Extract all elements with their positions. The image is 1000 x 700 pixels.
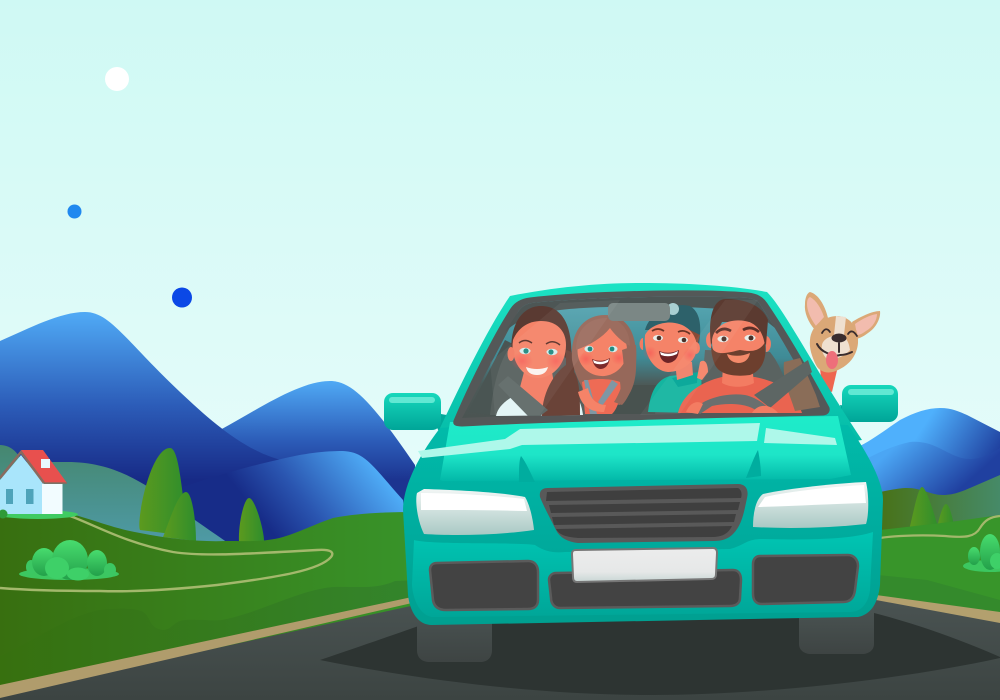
small shrub xyxy=(0,510,8,518)
blue dot large xyxy=(172,288,192,308)
right bush main xyxy=(980,534,1000,570)
dog right ear xyxy=(852,311,880,339)
woman iris right xyxy=(548,349,554,355)
dog right ear inner xyxy=(855,314,877,335)
girl blush left xyxy=(578,352,594,366)
car xyxy=(384,283,898,662)
grille slat 3 xyxy=(552,514,736,525)
tree 2 xyxy=(163,492,196,541)
far peak right xyxy=(220,381,415,560)
woman hair back xyxy=(511,306,571,365)
front wall xyxy=(0,455,44,514)
olive hill xyxy=(880,475,1000,560)
right side mirror xyxy=(840,385,898,425)
bush base xyxy=(19,568,119,580)
tree 3 xyxy=(239,498,264,542)
bush right xyxy=(963,534,1000,572)
girl face xyxy=(578,326,627,376)
main peak xyxy=(0,312,290,560)
driver seat xyxy=(700,350,795,410)
bush main lobe xyxy=(52,540,88,580)
boy neck xyxy=(675,362,693,380)
man eye left xyxy=(718,336,728,342)
girl arm xyxy=(578,388,606,412)
bush far left xyxy=(26,560,36,574)
left dark interior xyxy=(468,340,515,416)
left mountains xyxy=(0,312,415,560)
dog body xyxy=(820,366,838,392)
man neck xyxy=(722,365,754,387)
window 2 xyxy=(26,489,34,504)
man hand left xyxy=(686,402,703,414)
darker hill patch left xyxy=(0,580,420,688)
hood highlight right xyxy=(764,428,837,445)
path left xyxy=(0,516,332,591)
dog mouth xyxy=(817,343,852,356)
trees right xyxy=(909,487,954,530)
boy collar xyxy=(672,372,698,387)
grille slat 1 xyxy=(546,488,742,501)
right tree 1 xyxy=(909,487,938,530)
blue dot small xyxy=(68,204,82,218)
dog muzzle xyxy=(822,336,850,359)
hood crease right xyxy=(746,450,761,478)
mirror shell xyxy=(842,385,898,422)
woman long hair xyxy=(542,350,580,416)
left fog light xyxy=(430,561,538,610)
left headlight xyxy=(416,489,534,535)
woman neck xyxy=(518,372,556,414)
boy cap xyxy=(645,305,700,345)
girl iris right xyxy=(610,347,614,351)
woman ear xyxy=(508,347,514,361)
right tree 2 xyxy=(937,504,954,528)
dog blaze xyxy=(834,316,846,335)
headlight highlight xyxy=(758,485,866,507)
girl eye left xyxy=(584,346,594,352)
boy blush left xyxy=(643,346,657,360)
woman face xyxy=(513,321,566,378)
man hand right xyxy=(752,406,778,413)
trees left xyxy=(139,448,264,542)
man shirt xyxy=(678,377,802,413)
woman blush left xyxy=(511,352,533,370)
tree 1 xyxy=(139,448,186,535)
woman brows xyxy=(519,340,560,345)
cabin interior xyxy=(462,297,820,418)
woman blush right xyxy=(546,352,566,370)
car shadow xyxy=(320,600,1000,695)
girl hair side xyxy=(614,345,636,405)
hood crease left xyxy=(519,456,535,482)
steering wheel xyxy=(695,394,770,414)
mirror arm xyxy=(840,405,860,425)
white dot xyxy=(105,67,129,91)
center intake xyxy=(549,570,741,608)
mirror shell xyxy=(384,393,441,430)
dog tongue xyxy=(826,351,838,369)
window 1 xyxy=(6,489,13,504)
bush front left xyxy=(45,557,69,579)
woman iris left xyxy=(523,348,529,354)
grille slat 2 xyxy=(549,502,740,513)
boy eye left xyxy=(653,335,663,341)
man mouth xyxy=(727,353,750,363)
bush left xyxy=(19,540,119,580)
headlight lens xyxy=(416,489,534,535)
rear ridge xyxy=(860,408,1000,520)
teal hill xyxy=(0,445,228,543)
woman seatbelt xyxy=(498,376,548,416)
roof lining shade xyxy=(505,297,775,332)
road edge right xyxy=(876,595,1000,623)
mirror highlight xyxy=(389,397,435,403)
grille slat 4 xyxy=(556,526,732,538)
road edge left xyxy=(0,597,412,698)
grille xyxy=(540,484,748,543)
lawn xyxy=(0,510,78,519)
boy pupil left xyxy=(657,336,661,340)
boy eye right xyxy=(678,337,688,343)
headlight highlight xyxy=(421,493,527,511)
bush far right xyxy=(104,563,116,577)
rear view mirror xyxy=(608,303,670,321)
headlight lens xyxy=(753,482,868,528)
girl passenger xyxy=(572,315,636,414)
chimney xyxy=(41,459,50,468)
girl iris left xyxy=(588,347,592,351)
boy teeth xyxy=(660,351,678,356)
hood xyxy=(440,416,851,481)
dog left ear inner xyxy=(807,297,824,326)
left seat xyxy=(490,335,590,415)
right headlight xyxy=(753,482,868,528)
right bush front xyxy=(990,553,1000,569)
man face xyxy=(712,320,765,374)
dog eyes xyxy=(822,329,857,336)
dog head xyxy=(810,316,858,372)
car body xyxy=(403,415,883,625)
dog xyxy=(805,292,880,392)
man ears xyxy=(706,332,771,352)
ground right xyxy=(880,515,1000,630)
path right xyxy=(880,516,1000,538)
boy ears xyxy=(640,338,700,354)
girl mouth xyxy=(592,358,610,369)
boy face xyxy=(645,322,697,372)
roof xyxy=(21,450,67,483)
boy pupil right xyxy=(682,338,686,342)
girl eye right xyxy=(608,346,618,352)
woman shirt xyxy=(496,392,583,416)
boy shirt xyxy=(648,372,702,413)
windshield frame xyxy=(455,292,828,425)
windshield reflection xyxy=(490,300,758,416)
front ridge xyxy=(183,451,410,560)
left wheel xyxy=(417,600,492,662)
mirror highlight xyxy=(848,389,894,395)
dog left ear xyxy=(805,292,828,330)
boy hand xyxy=(697,361,708,380)
woman passenger xyxy=(496,306,583,416)
lower patch right xyxy=(878,575,1000,625)
rear seat shade xyxy=(612,385,660,414)
right wheel xyxy=(799,600,874,654)
bumper xyxy=(412,532,873,617)
man hair xyxy=(710,299,768,345)
girl bangs xyxy=(576,318,630,350)
side wall xyxy=(42,484,62,514)
man beard xyxy=(711,342,766,376)
man eye right xyxy=(744,335,756,341)
roof edge xyxy=(0,452,44,483)
grille frame xyxy=(540,484,748,543)
girl teeth xyxy=(593,359,609,364)
driver seat side xyxy=(784,358,820,411)
girl hair back xyxy=(572,315,636,405)
boy blush right xyxy=(683,348,697,362)
boy hair side xyxy=(690,330,700,345)
mirror arm xyxy=(430,412,452,434)
girl dress xyxy=(582,379,621,414)
girl blush right xyxy=(611,351,627,365)
dog nose xyxy=(832,334,846,342)
man seatbelt xyxy=(754,360,812,408)
car roof and pillars xyxy=(440,283,862,470)
woman eye left xyxy=(520,348,530,354)
hood highlight main xyxy=(418,423,760,458)
man pupil left xyxy=(722,336,726,342)
right mountains xyxy=(860,408,1000,560)
boy brows xyxy=(652,329,690,334)
bush right lobe xyxy=(87,550,107,576)
roof base line xyxy=(44,482,67,484)
woman mouth xyxy=(526,367,548,375)
bush left lobe xyxy=(32,548,56,576)
front ridge xyxy=(868,442,1000,520)
boy passenger xyxy=(640,303,708,413)
man driver xyxy=(678,299,820,414)
left side mirror xyxy=(384,393,452,434)
license plate xyxy=(572,548,717,582)
windshield xyxy=(455,292,828,425)
right bush left lobe xyxy=(968,547,980,565)
man pupil right xyxy=(748,336,754,340)
man brows xyxy=(716,328,759,333)
ground left xyxy=(0,511,420,695)
house xyxy=(0,450,78,519)
girl overall straps xyxy=(584,380,618,414)
boy cap highlight xyxy=(667,303,679,315)
right bush base xyxy=(963,560,1000,572)
woman eye right xyxy=(546,349,558,355)
boy mouth xyxy=(659,350,679,363)
bush front mid xyxy=(67,568,89,580)
right fog light xyxy=(753,555,858,604)
road xyxy=(0,598,1000,700)
